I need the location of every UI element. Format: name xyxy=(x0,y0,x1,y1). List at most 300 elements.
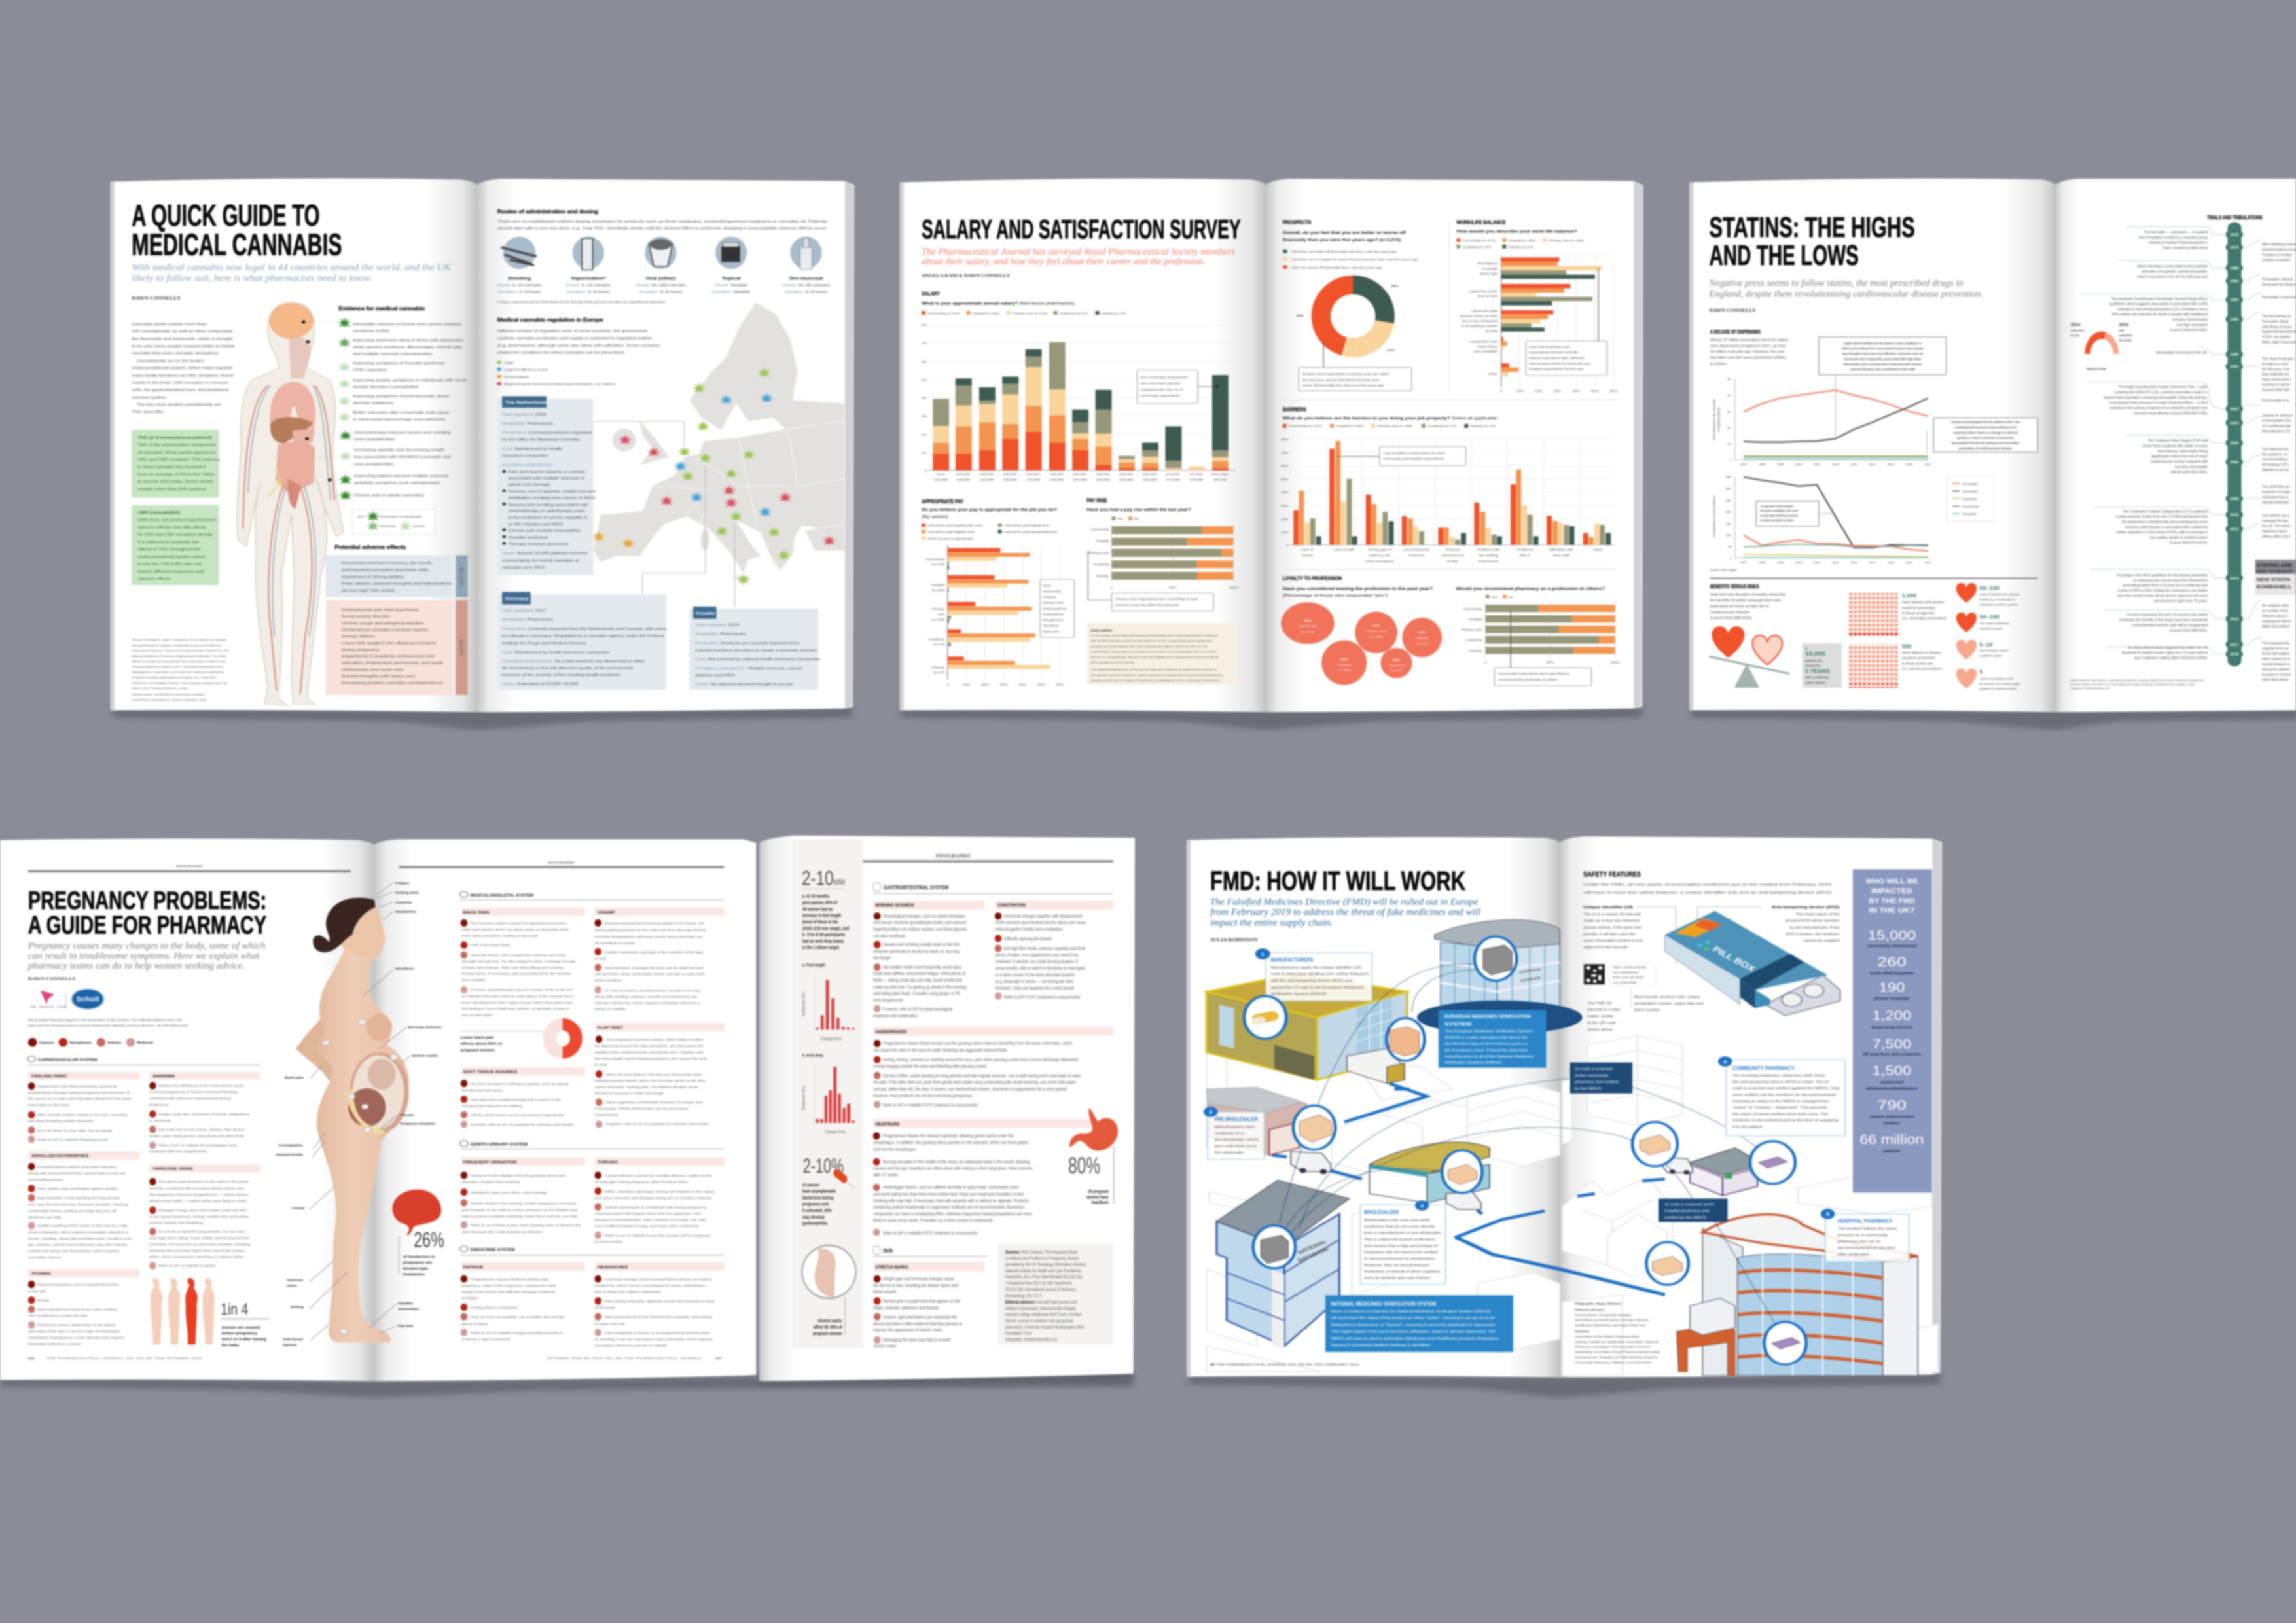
text: flat feet: if necessary. Off-the-shelf insoles can be purchased xyxy=(594,1107,687,1111)
panel: wholesalers: This is called risk-based verification, xyxy=(1364,1238,1436,1241)
subhead labels: HAEMORRHOIDS xyxy=(875,1029,907,1035)
chart: arch drop histogram: b. Arch drop xyxy=(802,1053,823,1058)
panel: wholesalers xyxy=(1361,1200,1446,1285)
barriers legend: Hospital (n=362) xyxy=(1336,425,1363,428)
panel: who will be impacted: 15,000 xyxy=(1868,929,1916,943)
stat: 2-10 mm: 2-10MM xyxy=(802,867,845,890)
chart: work-life bars: were available xyxy=(1473,350,1498,353)
stat: 2-10 percent: have asymptomatic xyxy=(802,1189,836,1194)
text column 2: blood vessel walls — makes veins more likely to swell xyxy=(149,1200,246,1203)
timeline text: left: (Lancet 2016;388:2532). xyxy=(2170,629,2208,633)
chart: barriers bars: Wrong type of xyxy=(1368,548,1391,552)
panel: Netherlands: Tourette syndrome xyxy=(508,536,548,539)
text: haemorrhoids: and pat, rather than rub, the area. If severe, use haemorrhoid creams, ointments or suppositories for a short period, xyxy=(873,1087,1067,1092)
stat: 1 in 4: 1in 4 xyxy=(221,1301,248,1319)
panel: sources: Foundation Trust xyxy=(1005,1331,1031,1336)
salary legend: Primary care (n=176) xyxy=(1012,312,1047,315)
panel: Croatia: Croatia xyxy=(696,611,715,616)
timeline text: left: type 2 diabetes mellitus (BMJ 2018;362:k3359). xyxy=(2134,656,2208,660)
barriers legend xyxy=(1283,424,1496,428)
subhead labels: SOFT TISSUE INJURIES xyxy=(463,1070,518,1074)
panel: sources: (provided by the UK Teratology Information Service); xyxy=(1005,1262,1087,1268)
subhead labels: BACK PAIN xyxy=(463,911,490,915)
timeline: 2005 xyxy=(2230,442,2239,446)
text: stretch marks: stretch marks xyxy=(873,1344,897,1349)
spread: statins xyxy=(1689,179,2296,730)
spread: salary and satisfaction survey xyxy=(900,179,1643,730)
panel: who will be impacted: 7,500 xyxy=(1873,1037,1911,1052)
stat: 1 in 4: and 1 in 4 after having xyxy=(222,1338,266,1342)
chart: barriers bars: money xyxy=(1302,554,1313,558)
subhead labels: THRUSH xyxy=(598,1160,618,1164)
callout: worklife: respondents felt their work-life xyxy=(1529,351,1578,355)
icon: QR code and pack details: SN 100000002 xyxy=(1613,971,1638,974)
unique identifier text: made up of four key elements xyxy=(1583,919,1640,923)
routes labels: Topical xyxy=(722,276,740,281)
chart: recommend bars: Hospital xyxy=(1469,618,1482,621)
panel: hospital pharmacy: 5 xyxy=(1826,1211,1829,1217)
subhead labels: VARICOSE VEINS xyxy=(152,1167,193,1171)
timeline text: right: The JUPITER stu xyxy=(2262,486,2289,489)
chart: salary stacked bars: More than xyxy=(1211,473,1229,476)
panel: short term xyxy=(326,556,467,597)
deck: likely to follow suit, here is what pharmacists need to know. xyxy=(132,273,372,283)
title xyxy=(132,198,342,261)
shadow xyxy=(901,707,1642,730)
panel: sources: National Institute for Health and Care Excellence; xyxy=(1005,1269,1082,1274)
qr notes xyxy=(1587,988,1703,1032)
callout: industry earnings: community respondents xyxy=(1140,395,1180,398)
chart: items dispensed: 0 xyxy=(1730,458,1732,461)
routes labels: Vaporisation* xyxy=(571,276,606,281)
right page xyxy=(1266,179,1643,712)
chart: bubbles: 56% xyxy=(1304,620,1312,623)
timeline text: right: developing CVD r xyxy=(2262,463,2289,467)
callout: lack of staff: Lack of staff is a clear barrier for most xyxy=(1383,452,1445,455)
credits: SecurMed UK; Trespass UK FMD Working Group for xyxy=(1575,1356,1658,1359)
panel: who will be impacted: private hospitals xyxy=(1874,997,1910,1001)
timeline text: right: cholesterol but w xyxy=(2262,496,2288,499)
key: KEY xyxy=(357,516,365,519)
callout: generic atorvastatin: As generic atorvastatin xyxy=(1760,505,1793,508)
panel: community pharmacy: COMMUNITY PHARMACY xyxy=(1732,1065,1795,1071)
callout: most respondents: should be xyxy=(1043,624,1059,628)
panel: sources: Infographic: dealermotorsdocx.co xyxy=(1005,1338,1058,1342)
callout: crestor: atorvastatin first line for primary and secondary xyxy=(1951,442,2020,444)
chart: salary stacked bars: £70,000- xyxy=(1166,473,1181,476)
evidence list: Increasing appetite and decreasing weight xyxy=(354,448,445,452)
deck: The Falsified Medicines Directive (FMD) will be rolled out in Europe xyxy=(1210,896,1479,907)
text: morning sickness: If severe, refer to GP for pharmacological xyxy=(883,1007,953,1012)
chart: pay rise bars: 50% xyxy=(1169,586,1177,590)
callout: generic atorvastatin xyxy=(1756,501,1832,526)
callout: lipitor xyxy=(1819,337,1946,438)
panel: sources: J Headache Pain 2017;18:106; Hypothesis xyxy=(1005,1281,1072,1286)
deck: from February 2019 to address the threat of fake medicines and will xyxy=(1210,906,1480,917)
text: heartburn: after 27 weeks xyxy=(873,1173,899,1178)
panel: short term: Decreased short-term memory, dry mouth, xyxy=(342,562,433,565)
timeline text: right: (MIs), eight revascular xyxy=(2262,341,2296,345)
chart: appropriate pay bars: Hospital xyxy=(931,584,944,587)
loyalty question: Have you considered leaving the profession in the past year? xyxy=(1283,586,1433,591)
chart: prospects donut: 27% xyxy=(1387,349,1395,353)
appropriate pay question: Do you believe your pay is appropriate for the job you do? xyxy=(922,507,1057,512)
timeline text: left: A review examining 30 years' of research into statins xyxy=(2127,613,2208,617)
source: Source: NHS Digital xyxy=(1710,569,1736,572)
chart: barriers bars: of date xyxy=(1447,560,1458,563)
evidence list: Improving anxiety symptoms in individuals with social xyxy=(353,378,467,382)
sponsor note: RB provided financial support in the production of this content. The editorial advisers were not xyxy=(28,1019,182,1022)
panel: Netherlands: associated with multiple sclerosis or xyxy=(508,476,585,480)
panel: European medicines verification system: (EMVS) is a data repository that stores the xyxy=(1444,1036,1528,1040)
icons: routes of administration xyxy=(501,236,822,270)
chart: items dispensed: 10 xyxy=(1727,442,1731,446)
key: Moderate xyxy=(380,525,396,528)
panel: short term: and impaired perception and motor skills xyxy=(342,569,429,572)
text: cramp: indicate a blood clot, which requires immediate referral to a xyxy=(594,1001,701,1005)
text: haemorrhoids: Refer to GP or midwife if OTC treatment is unsuccessful xyxy=(883,1103,978,1108)
stat: 26 percent: 26% xyxy=(414,1228,444,1252)
evidence list: Chemotherapy-induced nausea and vomiting xyxy=(354,431,451,435)
timeline text: right: Rosuvastatin is la xyxy=(2262,399,2290,402)
benefits text: particularly for those at high risk of xyxy=(1710,605,1769,609)
intro text: Cannabis plants contain more than xyxy=(132,323,207,327)
dotted data arrows xyxy=(1280,964,1778,1328)
map legend: Legal but difficult to access xyxy=(504,368,548,372)
chart: salary stacked bars: £40,000- xyxy=(1026,473,1041,476)
chart: barriers bars: Problems xyxy=(1517,548,1534,552)
chart: work-life bars: 30% xyxy=(1554,390,1562,393)
building: national database xyxy=(1217,1180,1350,1350)
panel: long term: during pregnancy xyxy=(342,648,380,652)
chart: salary stacked bars: Up to xyxy=(937,473,945,476)
text: constipation: unsuccessful, add or switch to lactulose or macrogols, xyxy=(996,966,1086,971)
text column 1: doctor. Swelling, along with persistent pain, usually in one xyxy=(28,1238,132,1241)
worklife legend: Hospital (n=362) xyxy=(1508,240,1536,243)
panel: CBD xyxy=(132,505,219,585)
intro text: The two most studied cannabinoids are xyxy=(137,403,221,407)
left page xyxy=(1187,837,1560,1378)
text column 1: a blood clot (deep vein thrombosis), which requires xyxy=(28,1250,120,1253)
spread: FMD xyxy=(1187,836,1942,1397)
panel: European medicines verification system: SYSTEM xyxy=(1444,1021,1471,1027)
callout: pay rise xyxy=(1088,550,1213,611)
panel: European medicines verification system: EUROPEAN MEDICINES VERIFICATION xyxy=(1444,1014,1531,1019)
chart: salary stacked bars: 1% xyxy=(922,452,927,455)
panel: hospital pharmacy: The product follows the same xyxy=(1838,1227,1897,1231)
text column 1: If itching is severe, particularly on the palms xyxy=(37,1324,116,1327)
callout: most respondents: thought they xyxy=(1043,619,1064,622)
recommend question: Would you recommend pharmacy as a profession to others? xyxy=(1456,586,1605,591)
panel: Netherlands: Nausea and vomiting associated with xyxy=(508,503,588,507)
stat: 2-10 percent: pyelonephritis xyxy=(802,1221,827,1226)
panel: CBD: It is believed to modulate the xyxy=(137,541,199,544)
text: heartburn: nausea and hiccups; heartburn are often worse after eating or when lying down. Most common xyxy=(873,1166,1033,1171)
chart: bubbles: 37% xyxy=(1372,624,1380,628)
road lines xyxy=(1272,1067,1665,1294)
callout: recommend xyxy=(1494,610,1591,686)
timeline text: right: 3-hydroxy-3-methyl xyxy=(2262,253,2292,257)
panel: who will be impacted: community pharmacies xyxy=(1867,945,1918,948)
timeline text: right: outweigh the ben xyxy=(2262,520,2289,523)
evidence list: disorder (nabilone) xyxy=(353,401,393,405)
chart: salary stacked bars: 5% xyxy=(922,379,927,382)
panel: national medicines verification system: distributed or dispensed, or "inactive", meaning it cannot be distributed or dispensed. xyxy=(1331,1323,1496,1327)
routes labels: Duration: 6–8 hours xyxy=(785,290,828,294)
benefits text: the benefits of statins outweigh their risks, xyxy=(1710,599,1782,603)
text column 2: exercises. Put your feet up whenever possible, including xyxy=(149,1243,250,1247)
appropriate pay legend: I think my pay is appropriate xyxy=(927,537,973,541)
panel: Netherlands: Date legalised: 2003 xyxy=(502,413,547,417)
text: back pain: time possible xyxy=(461,979,485,982)
panel: manufacturers: Verification System (EMVS) xyxy=(1271,992,1327,996)
qr notes: matrix, similar xyxy=(1587,1015,1613,1018)
worklife legend: Academia (n=47) xyxy=(1462,246,1491,249)
text: soft tissue: The feet can lead to soft tissue injuries, such as plantar xyxy=(471,1083,569,1086)
callout: worse off: Despite most respondents receiving a pay rise within xyxy=(1302,373,1389,376)
chart legend: Pravastatin xyxy=(1962,497,1977,501)
subhead labels: HEARTBURN xyxy=(875,1122,899,1127)
chart: pay rise bars: Academia xyxy=(1092,563,1109,567)
chart: salary stacked bars: £65,000- xyxy=(1143,473,1158,476)
panel: Germany: life threatening or that will affect the quality of life permanently xyxy=(502,666,634,670)
timeline text: left: Tokyo, headed by Akira Endo xyxy=(2162,247,2208,250)
panel: who will be impacted: patients xyxy=(1883,1150,1901,1153)
stats: benefits: heart attacks and strokes xyxy=(1902,601,1945,605)
callout: industry earnings: earn more than £80,000 xyxy=(1140,382,1180,385)
timeline text: left: is terminated early because of a large treatment effect — a 36% xyxy=(2109,401,2208,405)
stats: risks: would be caused xyxy=(1979,627,2002,630)
stats: risks xyxy=(1979,585,2020,690)
text: soft tissue: Heel pain when weight bearing that is worse in the xyxy=(471,1099,561,1102)
panel: European medicines verification system: Verification Systems (NMVS) xyxy=(1444,1061,1501,1065)
chart: prospects donut: 45% xyxy=(1297,314,1304,317)
figure labels: Heartburn xyxy=(395,967,414,971)
left page xyxy=(0,838,374,1381)
timeline: 1994 xyxy=(2230,298,2239,302)
chart: salary stacked bars: £24,999 xyxy=(934,478,948,482)
panel: CBD: adverse effects. xyxy=(137,577,171,581)
panel: THC: THC (Δ-9-tetrahydrocannabinol) xyxy=(137,436,211,440)
chart: work-life bars: 40% xyxy=(1572,390,1580,393)
stat: 2-10 mm: 2/10/1-2/10 mm range), and xyxy=(802,926,849,931)
spread: salary and satisfaction survey: SALARY AND SATISFACTION SURVEY xyxy=(922,215,1241,244)
chart: net ingredient cost: 2008 xyxy=(1759,561,1766,564)
icon: QR code and pack details: NDC 12345-678-90 xyxy=(1613,966,1646,969)
timeline text: right lower: subsequent discon xyxy=(2262,620,2291,624)
chart: salary stacked bars: £55,000- xyxy=(1096,473,1111,476)
chart: simvastatin gauge xyxy=(2070,322,2132,370)
panel: Germany: to cultivate in Germany. Regulated by a cannabis agency under the Federal xyxy=(502,634,664,638)
stat: 2-10 mm xyxy=(802,867,849,950)
text column 1: of pre-eclampsia, which requires immediate referral to a xyxy=(28,1231,129,1234)
logos: Scholl xyxy=(77,995,99,1003)
timeline: 1990 xyxy=(2230,280,2238,284)
section: skin xyxy=(873,1246,988,1256)
icon: one in four silhouettes xyxy=(151,1278,215,1344)
title: MEDICAL CANNABIS xyxy=(132,228,342,261)
panel: Croatia: Canada but there are plans to create a domestic industry xyxy=(695,649,817,652)
panel: wholesalers: such as dentists and care homes xyxy=(1364,1276,1430,1280)
panel: wholesalers: However, they do decommission xyxy=(1364,1264,1430,1268)
stats: benefits: in those at high risk xyxy=(1902,612,1935,615)
text: constipation: trimester). Only use laxatives for a short period xyxy=(996,986,1074,991)
timeline text: right lower: increase in muscle xyxy=(2262,673,2291,677)
chart: simvastatin gauge: 30% xyxy=(2119,322,2129,327)
callout: lipitor: simvastatin and a warning that it interacts with calcium xyxy=(1843,363,1922,366)
routes labels: Onset: 60–180 minutes xyxy=(636,284,687,287)
decade text: 44 million a decade ago. However, the cost xyxy=(1710,350,1784,354)
chart: barriers bars: environment xyxy=(1479,560,1499,563)
text: soft tissue: If painful, refer to GP or podiatrist for orthotics and insoles xyxy=(471,1124,574,1127)
panel: who will be impacted: 790 xyxy=(1877,1098,1907,1113)
deck: With medical cannabis now legal in 44 countries around the world, and the UK xyxy=(132,262,452,272)
intro text: cells, the gastrointestinal tract, and peripheral xyxy=(132,388,229,392)
deck: The Pharmaceutical Journal has surveyed Royal Pharmaceutical Society members xyxy=(922,246,1235,257)
text: heartburn: Avoid trigger factors, such as caffeine and fatty or spicy foods. Limit portion sizes xyxy=(883,1185,1019,1190)
text: cramp: Stay hydrated, massage the area and do daily foot and xyxy=(604,967,703,970)
chart: barriers bars: Lack of staff xyxy=(1334,548,1354,552)
routes intro: There are no established uniform dosing schedules for products such as fresh marijuana, smoked/vaporised marijuana or cannabis oil. Patients xyxy=(497,220,828,224)
sources: in medical cannabis administration and dosing. Eur J Intern Med xyxy=(132,676,217,679)
text: frequent urination: and forwards on the toilet to reduce pressure on the bladder and xyxy=(461,1209,577,1212)
timeline text: right: 40–80 years. It sh xyxy=(2262,368,2289,372)
stats: risks: 50–100 xyxy=(1979,585,2000,592)
panel: long term xyxy=(326,600,467,695)
timeline text: right: Two articles are p xyxy=(2262,514,2289,518)
map legend: Illegal (except for licensed cannabis-based derivatives, e.g. Sativex) xyxy=(504,383,615,386)
text column 1: along with reduced blood flow, causes fluid to leak into xyxy=(28,1172,126,1175)
evidence list: (oral cannabinoids) xyxy=(354,438,395,442)
chart: salary stacked bars: £64,999 xyxy=(1120,478,1134,482)
panel: UI code community: pharmacy and verified xyxy=(1575,1080,1619,1084)
panel: CBD: effects of THC throughout the xyxy=(137,548,201,552)
chart: barriers bars: 70% xyxy=(1281,452,1289,455)
chart legend: Simvastatin xyxy=(1962,482,1978,486)
panel: pre-wholesaler: PRE-WHOLESALER xyxy=(1215,1116,1258,1122)
running head: INFOGRAPHIC xyxy=(936,853,972,859)
text column 2: Refer to GP or midwife if painful xyxy=(158,1264,215,1268)
chart: items dispensed: Items dispensed in the community xyxy=(1712,399,1716,440)
subhead labels: FREQUENT URINATION xyxy=(463,1160,517,1164)
timeline text: left: significantly reduces the risk of major xyxy=(2151,455,2208,459)
stat: 26 percent: tension-type xyxy=(403,1268,429,1271)
evidence list: Improving patient-reported multiple sclerosis xyxy=(354,474,449,478)
chart: salary stacked bars: £39,999 xyxy=(1003,478,1017,482)
third page of pregnancy spread xyxy=(759,836,1135,1387)
text: back pain: lost feeling in one or both legs, bottom, or genitals, or pain in xyxy=(461,1007,569,1011)
panel: who will be impacted: WHO WILL BE xyxy=(1866,877,1918,885)
routes labels: Oro-mucosal xyxy=(789,276,823,281)
stats: benefits: heart attacks or strokes xyxy=(1902,651,1941,655)
anti-tampering text: cannot be supplied xyxy=(1803,940,1839,943)
text column 2: Enlarged, lumpy, blue veins visible under the skin. xyxy=(158,1209,248,1213)
prospects legend xyxy=(1283,249,1418,270)
anti-tampering text: by the manufacturer. If the xyxy=(1790,926,1840,929)
stat: 2-10 mm: post partum, 60% of xyxy=(802,901,838,906)
callout: industry earnings: compared with only 1% of xyxy=(1140,388,1183,391)
panel: Germany: Users: Estimated at 20,000–30,000 xyxy=(502,682,578,686)
text: morning sickness: and eating plain foods. Consider using ginger or P6 xyxy=(873,991,960,997)
panel: community pharmacy: On receiving medicines, pharmacy staff check xyxy=(1732,1074,1825,1078)
salary legend xyxy=(922,311,1126,315)
section: endocrine: ENDOCRINE SYSTEM xyxy=(471,1247,515,1252)
callout: lipitor: shift in prescribing from simvastatin because atorvastatin xyxy=(1841,347,1924,350)
routes labels: Onset: Variable xyxy=(715,284,748,287)
credits: Infographic: Maya Atkinson xyxy=(1575,1302,1621,1306)
routes intro: should start with a very low dose, e.g. 1mg THC, and titrate slowly until the desired effect is achieved, stopping if unacceptable adverse effects occur. xyxy=(497,226,827,230)
figure labels: Itching xyxy=(291,1306,304,1309)
unique identifier text: Unique identifier (UI) xyxy=(1583,906,1633,910)
text: cramp: before bedtime xyxy=(594,979,622,982)
chart: bubbles: (n=186) xyxy=(1370,635,1383,639)
chart: foot length histogram xyxy=(802,963,855,1041)
chart: net ingredient cost: 350 xyxy=(1726,476,1731,479)
evidence list: loss associated with HIV/AIDS (cannabis and xyxy=(354,455,451,459)
timeline text: left: prescribing statins from a 10-year risk of cardiovascular xyxy=(2123,584,2208,588)
panel: who will be impacted: 66 million xyxy=(1860,1133,1924,1147)
panel: manufacturers: code to their pack labelling (see 'safety features'), xyxy=(1271,972,1370,976)
text column 2: lentils, peas, leafy greens, citrus fruits and dried fruit) xyxy=(149,1135,243,1138)
stats: risks: cases of myopathy would xyxy=(1979,677,2013,680)
chart: recommend bars: Community xyxy=(1463,608,1482,611)
text: flat feet: walking (overpronation), which can increase strain on the feet, xyxy=(594,1079,706,1083)
text column 2: pillow. Wear compression stockings or support tights xyxy=(149,1256,243,1259)
chart: bubbles: Community xyxy=(1298,625,1318,628)
callout: most respondents: hospital, xyxy=(1043,596,1056,599)
chart: pay rise bars: Community xyxy=(1090,528,1109,531)
panel: Netherlands: Users: Around 10,000 patients received xyxy=(502,552,587,556)
chart: salary stacked bars: 6% xyxy=(922,361,927,364)
chart: work-life bars xyxy=(1449,221,1618,393)
timeline text: right: with 40mg of prava xyxy=(2261,325,2292,329)
subhead labels: FEELING FAINT xyxy=(31,1075,67,1079)
panel: Germany: Conditions indicated for: As a last resort for any illness that is either xyxy=(502,660,645,664)
panel: hospital pharmacy: pharmacy, but can be xyxy=(1838,1240,1882,1243)
panel: wholesalers: medicines that do not come directly xyxy=(1364,1225,1435,1229)
chart: items dispensed: in England (millions) xyxy=(1717,407,1721,432)
left page xyxy=(900,179,1266,712)
text: constipation: Difficulty opening the bowels xyxy=(1004,936,1052,942)
chart: appropriate pay bars: care xyxy=(937,613,945,616)
background city xyxy=(1207,1036,1938,1376)
text: fatigue: weight of the foetus and difficulty sleeping contribute xyxy=(461,1291,555,1294)
panel: UI code hospital: UI code is scanned at the xyxy=(1664,1203,1715,1207)
panel: Netherlands: Production: Licensed producers regulated xyxy=(502,431,592,435)
barriers legend: Primary care (n=186) xyxy=(1377,425,1412,428)
panel: European medicines verification system xyxy=(1439,1010,1546,1068)
panel: Germany xyxy=(497,592,667,690)
chart: arch drop histogram xyxy=(802,1053,855,1135)
timeline: 1976 xyxy=(2230,234,2238,237)
chart: appropriate pay bars: 50% xyxy=(1037,683,1045,687)
credits: Editorial advisers: xyxy=(1575,1309,1605,1312)
worklife legend: Community (n=372) xyxy=(1462,240,1496,243)
subhead labels: MORNING SICKNESS xyxy=(875,903,914,908)
shadow xyxy=(113,707,852,730)
panel: Croatia: Availability: Pharmacies xyxy=(695,632,746,636)
deck xyxy=(1708,279,1983,299)
credits: Industry; Healthcare Distribution Association; National xyxy=(1575,1341,1659,1344)
callout: worse off xyxy=(1299,342,1412,391)
chart: barriers bars: 10% xyxy=(1281,531,1289,535)
chart: work-life bars: of work xyxy=(1485,330,1498,333)
building: manufacturer xyxy=(1207,973,1407,1084)
stat: 80 percent xyxy=(1068,1153,1109,1205)
left page xyxy=(111,179,478,712)
chart: items dispensed: 30 xyxy=(1727,410,1731,414)
panel: wholesalers: medicines will not need to be verified xyxy=(1364,1251,1438,1255)
